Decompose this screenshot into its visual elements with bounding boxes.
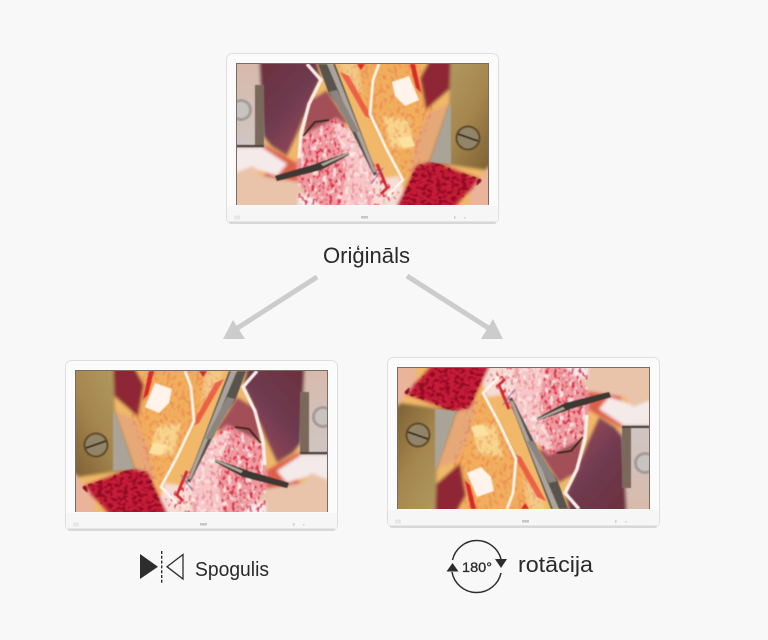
icon: 180 degree rotation (446, 541, 507, 593)
text: mirror label: Spogulis (195, 559, 269, 581)
panel: mirrored monitor (66, 360, 338, 531)
panel: rotated monitor (388, 358, 660, 528)
panel: original monitor (226, 54, 498, 224)
text: rotation label: rotācija (518, 552, 594, 577)
arrow: to rotation view (407, 276, 503, 339)
arrow: to mirror view (223, 277, 317, 339)
icon: mirror (140, 551, 183, 583)
heading: original label: Oriģināls (323, 243, 410, 268)
icon: 180 degree rotation: 180° (462, 559, 492, 575)
